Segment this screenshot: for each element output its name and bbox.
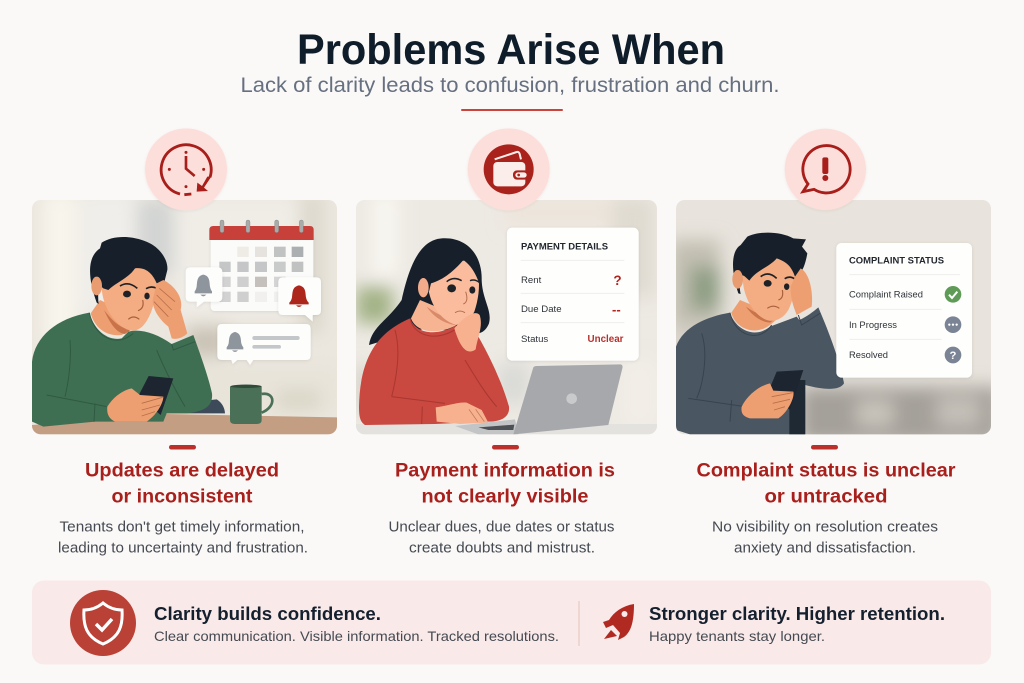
- column 1 heading: or inconsistent: [112, 486, 253, 508]
- row: rent: ?: [613, 273, 622, 288]
- column 1 body: Tenants don't get timely information,: [60, 520, 304, 536]
- column 3 body: No visibility on resolution creates: [712, 520, 938, 536]
- card dividers: [521, 260, 624, 323]
- banner heading left: Clarity builds confidence.: [154, 604, 381, 624]
- panel: complaint illustration: [670, 129, 1000, 443]
- row: in progress: In Progress: [849, 320, 897, 331]
- row: status: [521, 334, 624, 345]
- notification bubble: red bell: [278, 277, 321, 322]
- calendar: [209, 220, 314, 311]
- card dividers: [849, 275, 960, 339]
- column 3 heading: Complaint status is unclear: [696, 460, 956, 482]
- bottom banner: [32, 580, 991, 664]
- icon: delayed clock: [145, 128, 227, 210]
- row: status: Unclear: [588, 334, 624, 345]
- icon: check: [945, 286, 961, 303]
- banner divider: [578, 601, 580, 646]
- column 2 body: create doubts and mistrust.: [409, 540, 595, 556]
- icon: unknown: [945, 347, 961, 363]
- column 3 accent: [811, 445, 838, 450]
- banner text left: Clear communication. Visible information. Tracked resolutions.: [154, 628, 559, 644]
- laptop: [455, 364, 623, 434]
- banner heading right: Stronger clarity. Higher retention.: [649, 604, 945, 624]
- notification bubble: grey bell: [186, 267, 222, 307]
- column 3 body: anxiety and dissatisfaction.: [734, 540, 916, 556]
- row: due date: --: [612, 302, 621, 317]
- icon: rocket: [603, 604, 634, 640]
- column 2 heading: Payment information is: [395, 460, 615, 482]
- column 1 heading: Updates are delayed: [85, 460, 279, 482]
- row: resolved: Resolved: [849, 350, 888, 361]
- column 2 body: Unclear dues, due dates or status: [388, 520, 614, 536]
- man in green sweater: [32, 237, 212, 427]
- panel: payment illustration: [356, 128, 658, 434]
- icon: shield check: [70, 590, 136, 656]
- column 2 heading: not clearly visible: [422, 486, 589, 508]
- banner text right: Happy tenants stay longer.: [649, 628, 825, 644]
- panel: updates illustration: [32, 128, 340, 434]
- column 2 accent: [492, 445, 519, 450]
- payment details card: [507, 228, 639, 361]
- table: [32, 414, 337, 434]
- icon: alert speech bubble: [785, 129, 866, 210]
- title: Problems Arise When: [297, 26, 725, 74]
- icon: in progress dots: [945, 316, 961, 333]
- column 2 heading: [395, 460, 615, 508]
- column 1 accent: [169, 445, 196, 450]
- row: complaint raised: Complaint Raised: [849, 290, 923, 300]
- banner background: [32, 580, 991, 664]
- illustration background: [670, 200, 1000, 443]
- column 3 heading: or untracked: [764, 486, 888, 508]
- column 2 body: [388, 520, 614, 556]
- column 1 body: [58, 520, 308, 556]
- column 3 body: [712, 520, 938, 556]
- woman in red sweater: [359, 238, 509, 425]
- subtitle: Lack of clarity leads to confusion, frustration and churn.: [240, 74, 780, 97]
- column 3 heading: [696, 460, 956, 508]
- title underline: [461, 109, 563, 111]
- column 1 body: leading to uncertainty and frustration.: [58, 540, 308, 556]
- row: rent: [521, 273, 622, 288]
- notification bubble: message: [217, 324, 311, 365]
- complaint status card: [836, 243, 972, 378]
- illustration background: [356, 193, 658, 434]
- column 1 heading: [85, 460, 279, 508]
- chair: [167, 399, 225, 413]
- row: rent: Rent: [521, 275, 542, 286]
- icon: unknown: ?: [950, 350, 957, 362]
- row: status: Status: [521, 334, 548, 345]
- card title: payment details: PAYMENT DETAILS: [521, 242, 609, 252]
- card title: complaint status: COMPLAINT STATUS: [849, 256, 945, 266]
- coffee mug: [230, 385, 272, 424]
- row: due date: Due Date: [521, 304, 562, 315]
- man in grey sweater: [676, 233, 844, 434]
- icon: wallet: [468, 128, 550, 210]
- illustration background: [32, 193, 340, 434]
- row: due date: [521, 302, 621, 317]
